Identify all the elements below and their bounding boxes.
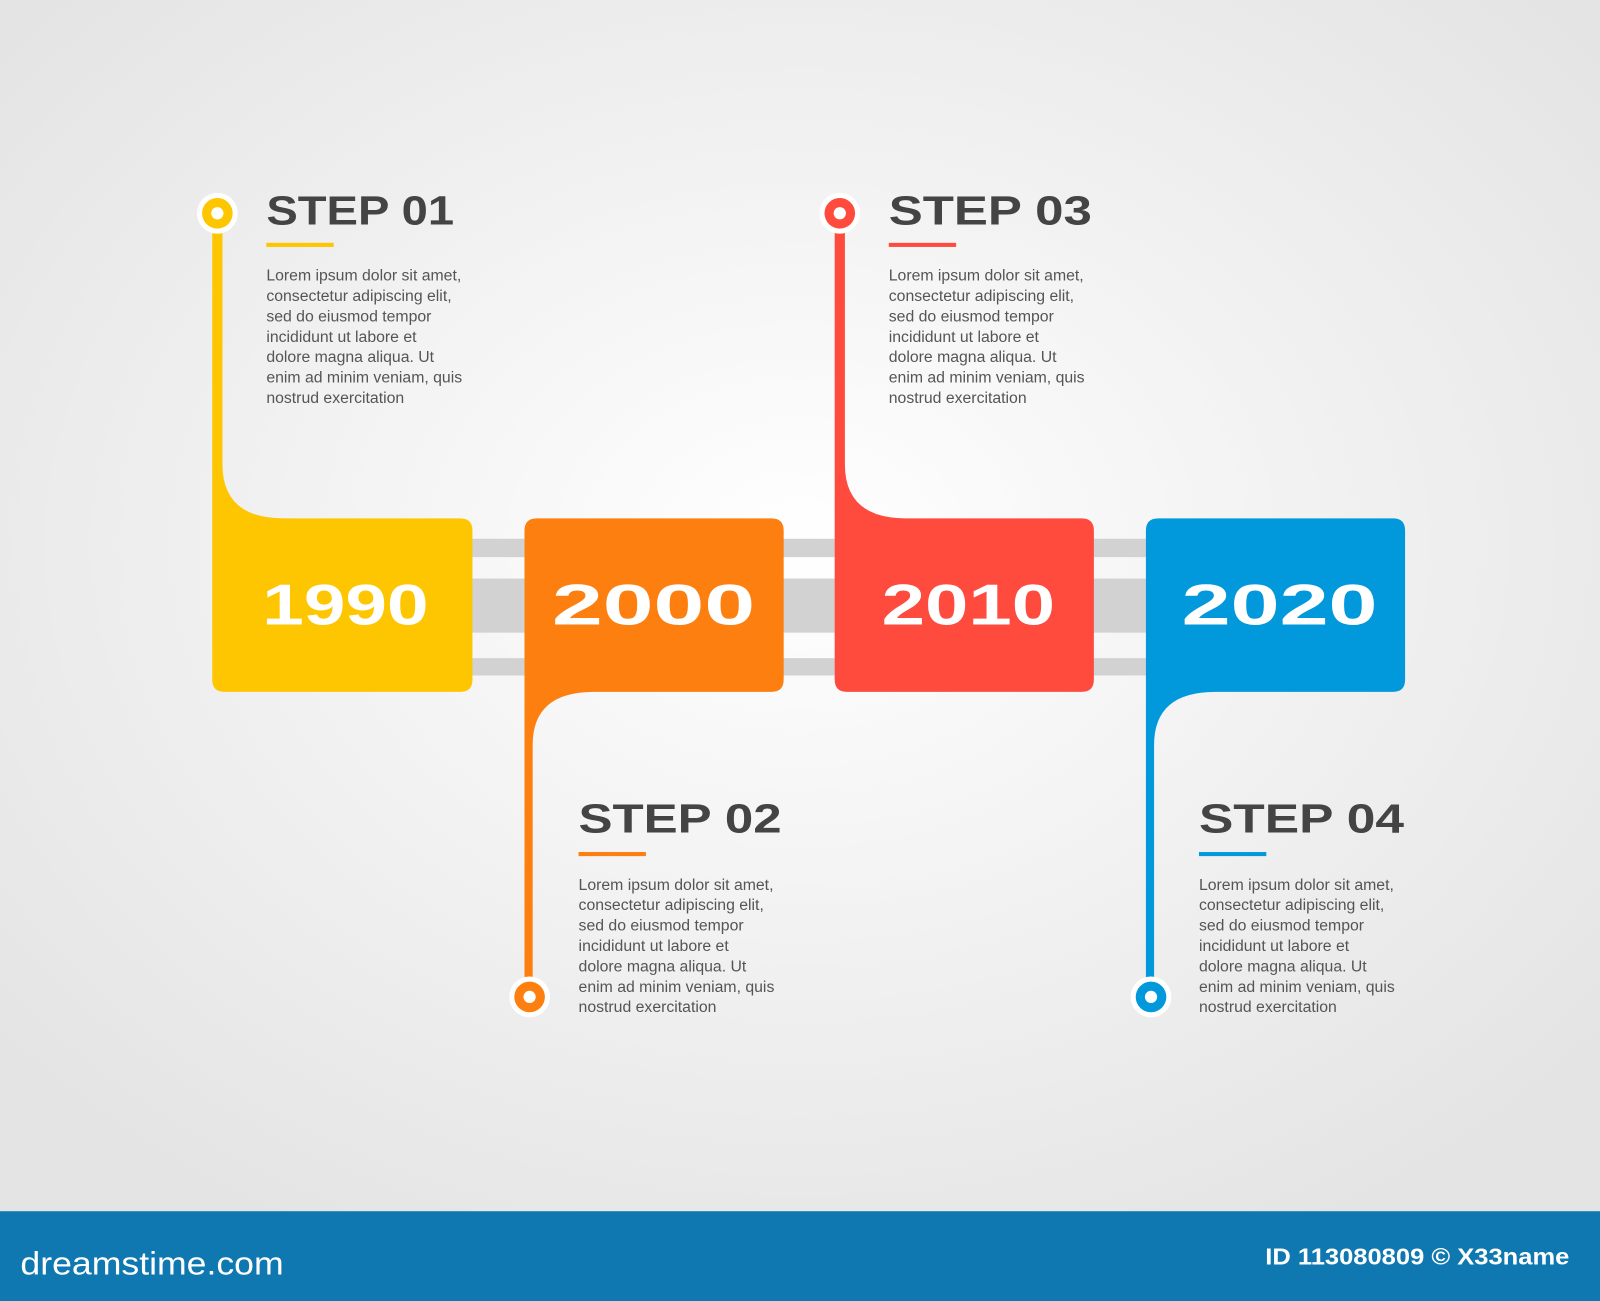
footer bar: dreamstime.com xyxy=(20,1244,284,1281)
text block: step 01: Lorem ipsum dolor sit amet, xyxy=(266,268,461,285)
year 2020: 2020 xyxy=(1182,573,1378,637)
text block: step 04: incididunt ut labore et xyxy=(1199,938,1350,955)
footer bar xyxy=(0,1211,1600,1301)
text block: step 01 xyxy=(266,187,462,407)
text block: step 03: consectetur adipiscing elit, xyxy=(889,288,1074,305)
footer bar: ID 113080809 © X33name xyxy=(1265,1243,1569,1269)
text block: step 02 xyxy=(579,796,782,1016)
text block: step 04: STEP 04 xyxy=(1199,796,1404,842)
text block: step 03: incididunt ut labore et xyxy=(889,329,1040,346)
text block: step 02: incididunt ut labore et xyxy=(579,938,729,955)
year 2000: 2000 xyxy=(552,573,755,637)
text block: step 01: STEP 01 xyxy=(266,187,454,233)
text block: step 02: nostrud exercitation xyxy=(579,999,716,1016)
text block: step 04: sed do eiusmod tempor xyxy=(1199,918,1364,935)
text block: step 04: nostrud exercitation xyxy=(1199,999,1337,1016)
text block: step 02: consectetur adipiscing elit, xyxy=(579,897,764,914)
text block: step 03: sed do eiusmod tempor xyxy=(889,308,1054,325)
step 03 marker: red box with stem xyxy=(819,193,1094,692)
text block: step 02: Lorem ipsum dolor sit amet, xyxy=(579,877,773,894)
text block: step 04: consectetur adipiscing elit, xyxy=(1199,897,1384,914)
text block: step 03: Lorem ipsum dolor sit amet, xyxy=(889,268,1084,285)
text block: step 03: dolore magna aliqua. Ut xyxy=(889,349,1057,366)
text block: step 01: sed do eiusmod tempor xyxy=(266,308,431,325)
text block: step 04 xyxy=(1199,796,1404,1016)
step 02 marker: orange box with stem xyxy=(509,518,784,1017)
text block: step 04: dolore magna aliqua. Ut xyxy=(1199,958,1367,975)
text block: step 01: incididunt ut labore et xyxy=(266,329,417,346)
text block: step 01: enim ad minim veniam, quis xyxy=(266,370,462,387)
text block: step 02: dolore magna aliqua. Ut xyxy=(579,958,747,975)
text block: step 03 xyxy=(889,187,1092,407)
text block: step 04: enim ad minim veniam, quis xyxy=(1199,979,1395,996)
text block: step 02: enim ad minim veniam, quis xyxy=(579,979,774,996)
year 2010: 2010 xyxy=(882,573,1055,637)
text block: step 01: consectetur adipiscing elit, xyxy=(266,288,452,305)
text block: step 02: sed do eiusmod tempor xyxy=(579,918,744,935)
text block: step 01: dolore magna aliqua. Ut xyxy=(266,349,435,366)
text block: step 04: Lorem ipsum dolor sit amet, xyxy=(1199,877,1394,894)
text block: step 01: nostrud exercitation xyxy=(266,390,404,407)
year 1990: 1990 xyxy=(262,573,429,637)
gray connector bars xyxy=(469,539,1149,675)
text block: step 02: STEP 02 xyxy=(579,796,782,842)
step 01 marker: yellow box with stem xyxy=(197,193,472,692)
step 04 marker: blue box with stem xyxy=(1131,518,1405,1017)
text block: step 03: nostrud exercitation xyxy=(889,390,1027,407)
text block: step 03: STEP 03 xyxy=(889,187,1092,233)
text block: step 03: enim ad minim veniam, quis xyxy=(889,370,1085,387)
